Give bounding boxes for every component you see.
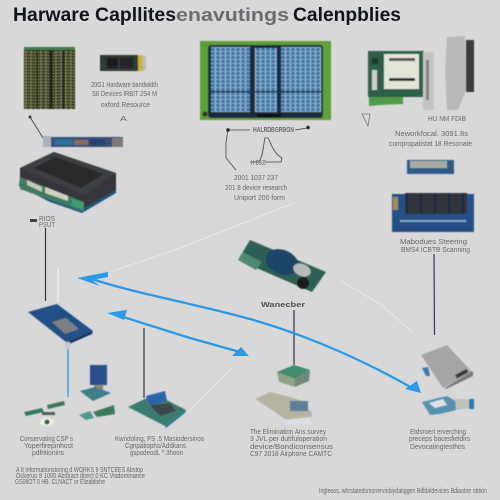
- leader line: to strip: [28, 116, 43, 138]
- icon: memory module grid: [24, 47, 75, 109]
- faint connector lines: [58, 203, 413, 410]
- text: middle-left caption: [115, 436, 204, 457]
- text: left caption: Yoperfirepinhost: [24, 443, 73, 450]
- text: left caption: pdfritionins: [32, 450, 64, 457]
- leader line: heatsink to grey box: [433, 254, 436, 335]
- text: top-left caption: A: [120, 116, 127, 123]
- arrow: double headed blue arrow: [107, 310, 249, 356]
- icon: silver drive with parts: [255, 392, 312, 424]
- text: lower-right caption: preceps bacesfieldirs: [409, 436, 470, 443]
- title: Harware Capllites: [13, 5, 176, 26]
- text: card caption: [389, 131, 472, 148]
- leader line: center loop: [226, 126, 310, 170]
- text: lower-right caption: [409, 429, 470, 451]
- text: lower-center caption: C97 2018 Airphone CAMTC: [250, 451, 332, 458]
- text: lower-left note: GS08OT 0 HB. CLNACT or Elizablishe: [15, 479, 105, 486]
- text: middle-left caption: Cgnpatiophs/Addkans: [125, 443, 186, 450]
- small label: enclosure: PSUT: [39, 222, 56, 229]
- text: top-left caption: [91, 82, 158, 123]
- leader line: center device down: [293, 310, 295, 365]
- icon: mainboard with blue chip: [238, 240, 326, 292]
- title: [13, 5, 401, 26]
- icon: slim expansion strip: [43, 136, 123, 147]
- text: lower-center caption: device/Bondiconsensus: [250, 444, 334, 451]
- text: card caption: Neworkfocal. 3091.8s: [395, 131, 469, 138]
- label: center device: Wanecber: [261, 300, 305, 309]
- text: center caption: 2001 1037 237: [234, 175, 278, 182]
- text: top-left caption: 20G1 Hardware bandwidth: [91, 82, 158, 89]
- icon: blue card isometric: [28, 304, 93, 349]
- text: lower-center caption: 3 JVL per dutifuloperation: [250, 436, 327, 443]
- icon: blue board with heatsink: [392, 193, 474, 232]
- text: lower-left note: Ockeruo 8 1000 Abstract direct 0 KC Visdominance: [16, 473, 145, 480]
- text: lower-center caption: The Elimination Ans survey: [250, 429, 326, 436]
- icon: M.2 card: [100, 55, 146, 71]
- text: heatsink caption: Mabodues Steering: [400, 239, 467, 246]
- icon: motherboard isometric: [128, 391, 186, 428]
- text: lower-right caption: Etdsroert erverching: [410, 429, 466, 436]
- icon: dark enclosure with board: [19, 152, 116, 213]
- icon: PCIe network card: [368, 36, 474, 110]
- icon: large green board with blue cell array: [200, 41, 331, 120]
- text: left caption: [20, 436, 73, 457]
- arrow: long blue arrow to lower right device: [77, 272, 421, 393]
- icon: exploded small parts: [422, 396, 474, 415]
- icon: small cube board: [277, 365, 310, 387]
- text: top-left caption: oxford Resource: [101, 102, 150, 109]
- text: lower-right caption: Devocatingtesthos: [410, 444, 465, 451]
- title: Calenpblies: [293, 5, 401, 26]
- text: heatsink caption: BMS4 ICBTB Scanning: [401, 247, 470, 254]
- title: enavutings: [176, 5, 289, 25]
- text: center caption: [225, 160, 287, 202]
- text: lower-left note: [15, 467, 145, 486]
- text: left caption: Conservating CSP s: [20, 436, 73, 443]
- leader line: enclosure to blue card: [44, 228, 46, 301]
- text: middle-left caption: Kwndoling, FS .5 Masiodersinos: [115, 436, 204, 443]
- text: lower-left note: A 8 Informationstoring d.WORKS 9 SNTCEES Abstop: [16, 467, 143, 474]
- text: center caption: H BIKE: [251, 160, 266, 167]
- label: center heading: HALRDBGRBGN: [253, 127, 294, 134]
- icon: small module: [407, 160, 454, 174]
- text: lower-center caption: [250, 429, 334, 458]
- text: center caption: Uniport 200 form: [234, 195, 285, 202]
- text: card caption: compropatistat 18 Resonate: [389, 141, 472, 148]
- text: top-left caption: S8 Devices IRBIT 2S4 M: [92, 91, 157, 98]
- blue connector: card to parts: [67, 349, 69, 397]
- small label: enclosure: [30, 216, 56, 229]
- icon: grey box device: [421, 345, 473, 389]
- text: heatsink caption: [400, 239, 470, 254]
- text: middle-left caption: gspodeodL ^.3hoon: [130, 450, 183, 457]
- text: center caption: 201 8 device research: [225, 185, 287, 192]
- icon: scattered small modules: [24, 401, 65, 426]
- leader mark: card bracket: [362, 114, 370, 126]
- leader line: to motherboard: [143, 328, 145, 398]
- label: card: HU NM FDIB: [428, 116, 466, 123]
- icon: tower cooler on board: [79, 365, 115, 420]
- small label: enclosure: RIOS: [39, 216, 55, 223]
